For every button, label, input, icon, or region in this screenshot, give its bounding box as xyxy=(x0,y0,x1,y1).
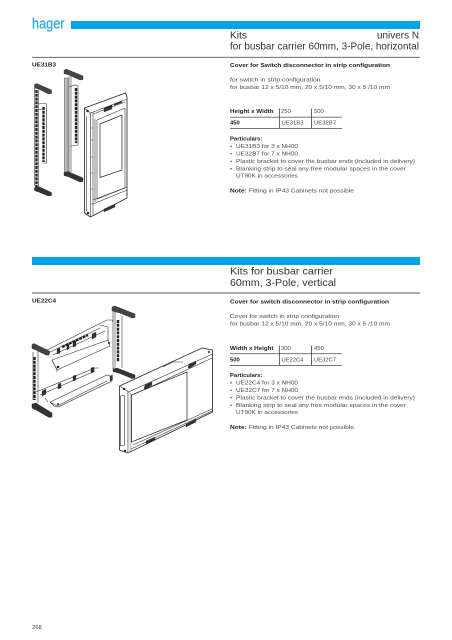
product code: UE31B3 xyxy=(32,62,57,68)
description xyxy=(230,300,390,328)
logo: hager: hager xyxy=(32,16,65,32)
particulars list: • xyxy=(230,380,232,386)
table: height x width: 450 xyxy=(230,120,241,126)
title: kits univers N: for busbar carrier 60mm, 3-Pole, horizontal xyxy=(230,42,419,52)
particulars list: • xyxy=(230,151,232,157)
title: kits vertical xyxy=(230,266,336,289)
particulars list: Plastic bracket to cover the busbar ends (included in delivery) xyxy=(236,159,415,165)
illustration: horizontal cover exploded view xyxy=(34,69,127,217)
illustration: vertical cover exploded view xyxy=(32,306,212,453)
table: height x width: 500 xyxy=(314,109,325,115)
cover panel xyxy=(84,93,127,217)
particulars list xyxy=(230,136,415,180)
particulars list xyxy=(230,373,415,416)
description: Cover for switch disconnector in strip configuration xyxy=(230,300,389,306)
particulars list: • xyxy=(230,144,232,150)
left strip xyxy=(32,344,52,418)
table: height x width: UE32B7 xyxy=(314,120,336,126)
middle strip xyxy=(64,69,83,182)
product code: UE22C4 xyxy=(32,298,57,304)
description: for busbar 12 x 5/10 mm, 20 x 5/10 mm, 30 x 5 /10 mm xyxy=(230,322,390,328)
title: kits vertical: 60mm, 3-Pole, vertical xyxy=(230,278,336,289)
section: UE31B3 horizontal kit xyxy=(32,30,420,217)
particulars list: • xyxy=(230,395,232,401)
note: Note: Fitting in IP43 Cabinets not possible xyxy=(230,425,355,431)
particulars list: Blanking strip to seal any free modular spaces in the cover xyxy=(236,403,406,409)
cover panel xyxy=(120,348,212,453)
table: width x height: 450 xyxy=(314,346,325,352)
particulars list: Blanking strip to seal any free modular spaces in the cover xyxy=(236,166,406,172)
upper rail xyxy=(45,320,113,372)
section: UE22C4 vertical kit xyxy=(32,257,420,453)
header bar xyxy=(71,21,420,29)
particulars list: • xyxy=(230,388,232,394)
particulars list: UT90K in accessories xyxy=(236,410,298,416)
table: height x width: 250 xyxy=(281,109,292,115)
title: kits univers N xyxy=(230,30,419,52)
description: Cover for Switch disconnector in strip configuration xyxy=(230,63,390,69)
title: kits univers N: Kits xyxy=(230,30,247,42)
particulars list: Particulars: xyxy=(230,373,262,379)
table: height x width: Height x Width xyxy=(230,109,274,115)
table: width x height: 500 xyxy=(230,357,241,363)
description xyxy=(230,63,390,91)
page number: 268 xyxy=(32,625,43,631)
particulars list: Particulars: xyxy=(230,136,262,142)
title: kits univers N: univers N xyxy=(377,30,419,42)
section bar xyxy=(32,257,420,265)
table: height x width xyxy=(230,108,342,128)
table: width x height: Width x Height xyxy=(230,346,274,352)
lower rail xyxy=(36,367,112,407)
note: Note: Fitting in IP43 Cabinets not possible xyxy=(230,188,355,194)
description: for busbar 12 x 5/10 mm, 20 x 5/10 mm, 30 x 5 /10 mm xyxy=(230,85,390,91)
particulars list: UE22C4 for 3 x NH00 xyxy=(236,380,299,386)
window xyxy=(132,372,187,442)
table: width x height: UE22C4 xyxy=(282,357,304,363)
table: width x height xyxy=(230,346,342,365)
left strip xyxy=(34,84,52,196)
particulars list: Plastic bracket to cover the busbar ends (included in delivery) xyxy=(236,395,415,401)
window xyxy=(100,115,122,178)
particulars list: UE32C7 for 7 x NH00 xyxy=(236,388,299,394)
particulars list: UE31B3 for 3 x NH00 xyxy=(236,144,299,150)
particulars list: UE32B7 for 7 x NH00 xyxy=(236,151,299,157)
table: height x width: UE31B3 xyxy=(282,120,304,126)
particulars list: UT90K in accessories xyxy=(236,174,298,180)
description: Cover for switch in strip configuration xyxy=(230,314,339,320)
particulars list: • xyxy=(230,166,232,172)
particulars list: • xyxy=(230,403,232,409)
right strip xyxy=(112,306,135,378)
particulars list: • xyxy=(230,159,232,165)
title: kits vertical: Kits for busbar carrier xyxy=(230,266,334,278)
table: width x height: 300 xyxy=(281,346,292,352)
table: width x height: UE32C7 xyxy=(314,357,336,363)
description: for switch in strip configuration xyxy=(230,78,320,84)
